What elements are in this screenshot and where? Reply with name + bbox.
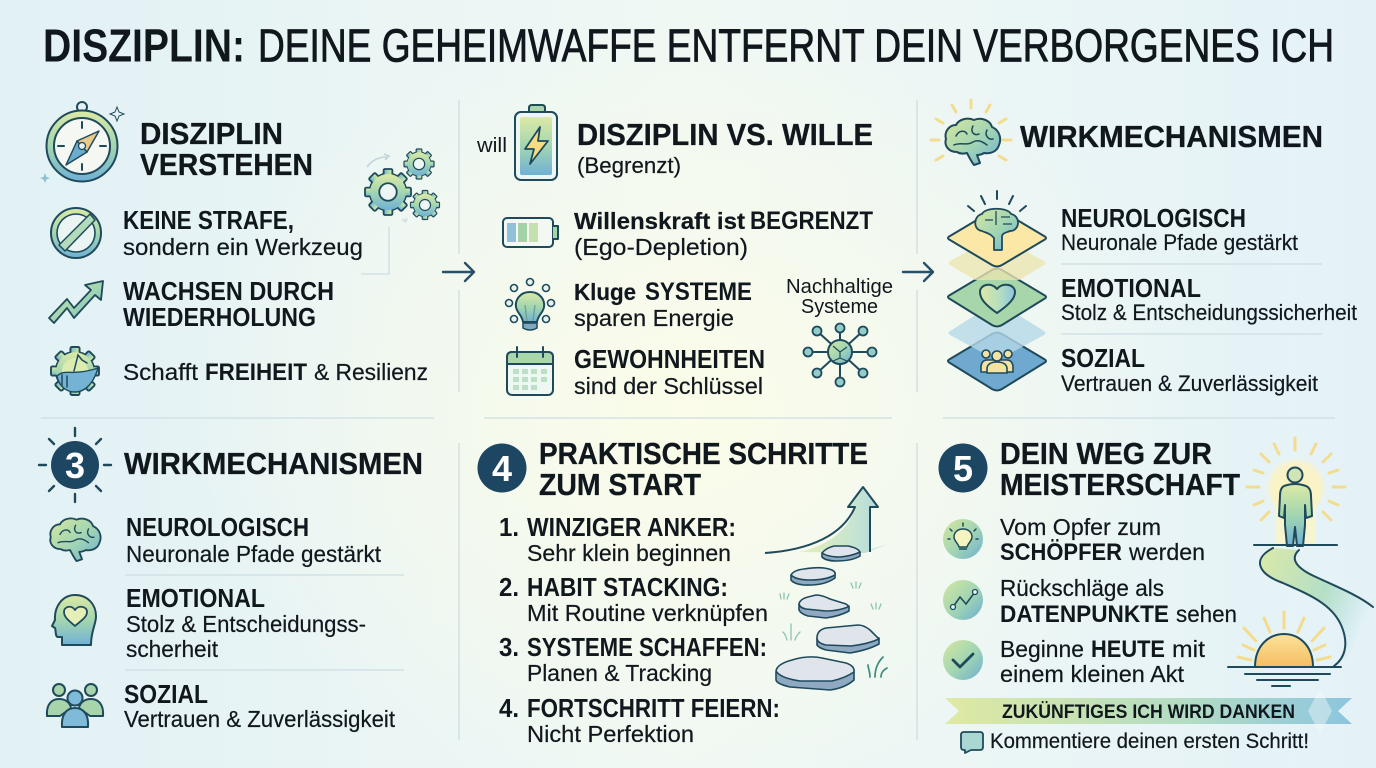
text: Willenskraft begrenzt xyxy=(574,207,873,260)
step 1 xyxy=(499,512,736,566)
text: kluge Systeme xyxy=(574,278,752,331)
text: sozial xyxy=(124,679,396,732)
icon: brain xyxy=(50,518,101,561)
heading: Disziplin vs. Wille xyxy=(577,117,873,178)
label: nachhaltige Systeme xyxy=(786,276,893,318)
heading: Disziplin verstehen: DISZIPLIN xyxy=(140,116,283,151)
illustration: rising arrow xyxy=(765,487,890,553)
panel: Wirkmechanismen bottom xyxy=(39,428,423,732)
text: Rückschläge als Datenpunkte xyxy=(1000,575,1237,628)
icon: bulb badge xyxy=(943,519,983,559)
step 2: Mit Routine verknüpfen xyxy=(527,600,768,626)
text: vom Opfer zum Schöpfer xyxy=(1000,514,1205,566)
text: vom Opfer zum Schöpfer: werden xyxy=(1128,539,1205,565)
arrow: panel 1 to panel 2 xyxy=(443,263,474,281)
text: emotional: EMOTIONAL xyxy=(1061,273,1201,303)
text: emotional: Stolz & Entscheidungss- xyxy=(126,611,366,637)
step 3: 3. xyxy=(499,632,519,662)
text: neurologisch xyxy=(126,512,382,567)
illustration: winding path xyxy=(1260,548,1376,666)
text: Rückschläge als Datenpunkte: Rückschläge als xyxy=(1000,575,1164,601)
step 4 xyxy=(499,693,780,747)
heading: Dein Weg zur Meisterschaft xyxy=(1000,436,1240,502)
step 1: 1. xyxy=(499,512,519,542)
text: keine Strafe: KEINE STRAFE, xyxy=(123,205,294,235)
icon: data points badge xyxy=(943,580,983,620)
text: beginne heute: HEUTE xyxy=(1091,636,1165,663)
panel: Wirkmechanismen top xyxy=(931,100,1357,396)
icon: growth arrow xyxy=(49,281,103,323)
icon: people xyxy=(47,684,103,727)
icon: gear landscape xyxy=(51,347,99,395)
text: emotional xyxy=(126,583,366,662)
icon: charged battery xyxy=(515,105,557,180)
text: neurologisch: NEUROLOGISCH xyxy=(1061,203,1246,233)
step 3 xyxy=(499,632,767,686)
heading: praktische Schritte: PRAKTISCHE SCHRITTE xyxy=(539,436,868,471)
text: neurologisch: Neuronale Pfade gestärkt xyxy=(1061,230,1298,255)
step 3: SYSTEME SCHAFFEN: xyxy=(527,632,767,662)
banner: zukünftiges Ich: ZUKÜNFTIGES ICH WIRD DANKEN xyxy=(1002,702,1295,723)
icon: head with heart xyxy=(52,595,96,645)
text: wachsen durch Wiederholung: WIEDERHOLUNG xyxy=(123,302,316,332)
badge: number 3 xyxy=(39,428,111,502)
text: sozial xyxy=(1061,343,1318,396)
text: keine Strafe: sondern ein Werkzeug xyxy=(123,234,363,260)
arrow: panel 2 to panel 3 xyxy=(903,263,933,281)
text: emotional: scherheit xyxy=(126,636,219,662)
illustration: person in sunlight xyxy=(1247,438,1345,546)
title: DISZIPLIN: xyxy=(43,20,245,72)
heading: Wirkmechanismen: WIRKMECHANISMEN xyxy=(1020,119,1323,154)
step 2: HABIT STACKING: xyxy=(527,572,728,602)
illustration: stepping stones xyxy=(776,546,879,690)
text: emotional: Stolz & Entscheidungssicherheit xyxy=(1061,300,1357,325)
text: vom Opfer zum Schöpfer: Vom Opfer zum xyxy=(1000,514,1161,540)
panel: Disziplin vs. Wille xyxy=(476,105,893,399)
text: Rückschläge als Datenpunkte: DATENPUNKTE xyxy=(1000,601,1169,628)
icon: low battery xyxy=(503,218,558,247)
panel: Dein Weg zur Meisterschaft xyxy=(938,436,1376,753)
heading: Disziplin vs. Wille: DISZIPLIN VS. WILLE xyxy=(577,117,873,152)
step 1: WINZIGER ANKER: xyxy=(527,512,736,542)
icon: check badge xyxy=(943,640,983,680)
panel: Disziplin verstehen xyxy=(40,102,440,395)
text: emotional: EMOTIONAL xyxy=(126,583,265,613)
text: Willenskraft begrenzt: BEGRENZT xyxy=(750,207,873,235)
icon: network globe xyxy=(804,324,876,386)
text: beginne heute: Beginne xyxy=(1000,636,1084,662)
illustration: rising sun xyxy=(1228,612,1341,686)
banner: zukünftiges Ich xyxy=(945,688,1352,734)
label: nachhaltige Systeme: Systeme xyxy=(801,296,878,318)
text: Rückschläge als Datenpunkte: sehen xyxy=(1176,601,1237,627)
text: keine Strafe xyxy=(123,205,363,260)
step 2: 2. xyxy=(499,572,519,602)
text: Willenskraft begrenzt: (Ego-Depletion) xyxy=(574,234,748,260)
heading: praktische Schritte: ZUM START xyxy=(539,467,701,502)
text: vom Opfer zum Schöpfer: SCHÖPFER xyxy=(1000,539,1122,566)
heading: Dein Weg zur Meisterschaft: MEISTERSCHAFT xyxy=(1000,467,1240,502)
heading: Dein Weg zur Meisterschaft: DEIN WEG ZUR xyxy=(1000,436,1212,471)
text: emotional xyxy=(1061,273,1357,325)
text: Schafft Freiheit und Resilienz: & Resilienz xyxy=(314,359,428,385)
panel: praktische Schritte xyxy=(478,436,890,747)
text: Willenskraft begrenzt: Willenskraft ist xyxy=(574,208,745,234)
text: kluge Systeme: Kluge xyxy=(574,279,636,305)
icon: comment bubble xyxy=(961,732,983,753)
step 4: FORTSCHRITT FEIERN: xyxy=(527,693,780,723)
heading: Disziplin vs. Wille: (Begrenzt) xyxy=(577,153,681,178)
text: neurologisch: NEUROLOGISCH xyxy=(126,512,309,542)
heading: Disziplin verstehen xyxy=(140,116,313,182)
icon: light bulb network xyxy=(506,278,554,330)
text: wachsen durch Wiederholung xyxy=(123,276,334,332)
step 4: 4. xyxy=(499,693,519,723)
step 2 xyxy=(499,572,768,626)
step 4: Nicht Perfektion xyxy=(527,721,694,747)
badge: number 4 xyxy=(478,444,526,492)
call to action: Kommentiere deinen ersten Schritt! xyxy=(990,730,1309,753)
text: wachsen durch Wiederholung: WACHSEN DURCH xyxy=(123,276,334,306)
icon: glowing brain xyxy=(931,100,1011,165)
icon: calendar xyxy=(507,347,553,395)
text: kluge Systeme: SYSTEME xyxy=(645,278,752,306)
text: beginne heute: mit xyxy=(1172,636,1206,662)
diagram: stacked layers xyxy=(948,191,1046,390)
text: kluge Systeme: sparen Energie xyxy=(574,305,734,331)
text: neurologisch xyxy=(1061,203,1298,255)
label: will: will xyxy=(476,135,507,157)
text: beginne heute xyxy=(1000,636,1206,687)
badge: number 4: 4 xyxy=(492,448,512,489)
icon: gears xyxy=(361,149,440,274)
text: sozial: Vertrauen & Zuverlässigkeit xyxy=(1061,371,1318,396)
badge: number 5 xyxy=(938,444,988,492)
vertical and horizontal dividers xyxy=(41,100,1335,740)
illustration: grass xyxy=(780,582,887,677)
icon: compass xyxy=(40,102,124,183)
text: Schafft Freiheit und Resilienz: Schafft xyxy=(123,359,199,385)
text: Schafft Freiheit und Resilienz: FREIHEIT xyxy=(205,359,307,386)
text: Gewohnheiten: GEWOHNHEITEN xyxy=(574,344,765,374)
step 1: Sehr klein beginnen xyxy=(527,540,731,566)
heading: praktische Schritte xyxy=(539,436,868,502)
text: sozial: SOZIAL xyxy=(1061,343,1145,373)
text: beginne heute: einem kleinen Akt xyxy=(1000,661,1185,687)
text: neurologisch: Neuronale Pfade gestärkt xyxy=(126,541,382,567)
step 3: Planen & Tracking xyxy=(527,660,712,686)
badge: number 3: 3 xyxy=(65,445,85,486)
text: sozial: Vertrauen & Zuverlässigkeit xyxy=(124,706,396,732)
badge: number 5: 5 xyxy=(953,448,973,489)
icon: no sign xyxy=(51,208,101,258)
label: nachhaltige Systeme: Nachhaltige xyxy=(786,276,893,298)
text: sozial: SOZIAL xyxy=(124,679,208,709)
text: Gewohnheiten xyxy=(574,344,765,399)
heading: Wirkmechanismen: WIRKMECHANISMEN xyxy=(124,446,423,481)
text: Schafft Freiheit und Resilienz xyxy=(123,359,428,386)
heading: Disziplin verstehen: VERSTEHEN xyxy=(140,147,313,182)
text: Gewohnheiten: sind der Schlüssel xyxy=(574,373,763,399)
